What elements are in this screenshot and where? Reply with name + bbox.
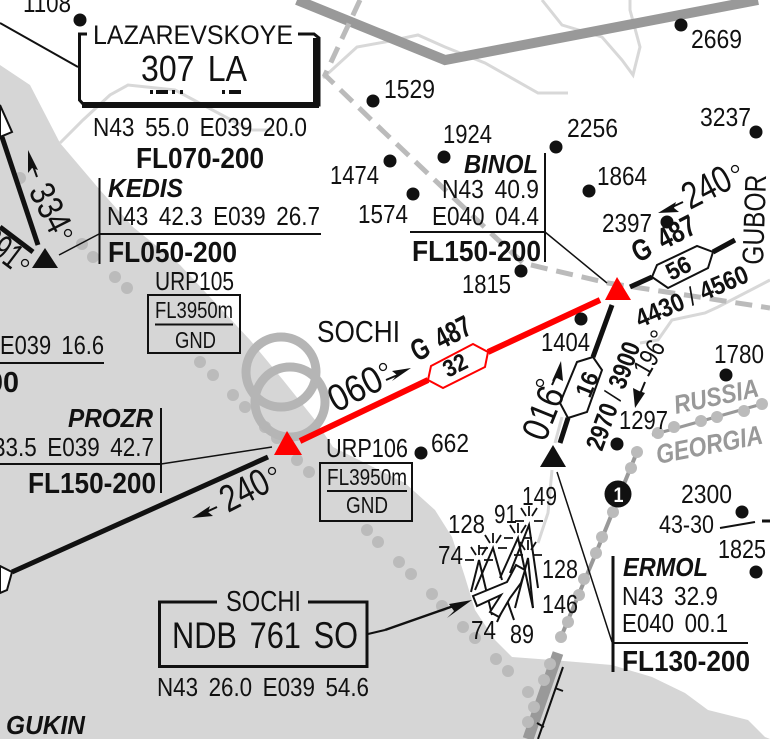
NDB Lazarevskoye box: FL070-200 [136, 143, 264, 175]
waypoint triangles [32, 248, 631, 467]
track 060: 060 [321, 358, 390, 421]
Sochi airport circles [246, 337, 325, 437]
label SOCHI: SOCHI [317, 314, 400, 349]
fix KEDIS [59, 173, 321, 269]
airway segment G487 black east [630, 240, 735, 288]
spot elevations: 1474 [330, 160, 379, 190]
restricted area URP105 [148, 266, 240, 353]
spot elevations: 2669 [691, 24, 742, 54]
obstacle cluster [438, 481, 578, 649]
restricted area URP106: FL3950m [327, 464, 407, 490]
airway segment G487 red: 32 [438, 348, 472, 383]
restricted area URP105: GND [175, 327, 216, 353]
fix BINOL: N43 40.9 [442, 174, 539, 204]
spot elevations: 1864 [597, 161, 647, 191]
NDB Lazarevskoye box: N43 55.0 E039 20.0 [93, 112, 307, 142]
grid minimum 43-30 [659, 511, 770, 539]
obstacle cluster: 91 [494, 499, 517, 529]
restricted area URP106: URP106 [326, 433, 408, 463]
NDB Sochi box: N43 26.0 E039 54.6 [157, 672, 369, 702]
fix BINOL: E040 04.4 [432, 201, 539, 231]
note marker 1: 1 [614, 484, 624, 507]
NDB Lazarevskoye box: 307 LA [141, 48, 247, 89]
thick grey road [297, 0, 758, 60]
track 196 [627, 331, 671, 408]
airway label G 487 east: G 487 [626, 209, 702, 269]
fix BINOL: BINOL [464, 149, 538, 179]
track 291 clipped [0, 219, 31, 277]
track 240 west [192, 461, 277, 521]
spot elevations: 1574 [358, 199, 408, 229]
clipped fix west [0, 330, 104, 399]
NDB Lazarevskoye box [0, 20, 319, 175]
airway segment 016 [560, 305, 612, 443]
track 334 [21, 150, 80, 239]
obstacle cluster: 89 [510, 619, 534, 649]
spot elevations: 3237 [700, 102, 751, 132]
fix ERMOL: E040 00.1 [622, 608, 728, 638]
fix ERMOL [557, 472, 750, 678]
note marker 1 [604, 480, 632, 508]
track 196: 196 [627, 335, 671, 381]
obstacle cluster: 149 [522, 481, 557, 511]
fix KEDIS: KEDIS [108, 173, 184, 203]
obstacle cluster: 74 [471, 615, 496, 645]
airway segment G487 black east: 56 [661, 251, 696, 286]
spot elevations: 662 [431, 428, 469, 458]
grid minimum 43-30: 43-30 [659, 511, 714, 539]
spot elevations: 2397 [602, 208, 652, 238]
restricted area URP105: URP105 [155, 266, 234, 296]
restricted area URP106 [320, 433, 412, 521]
fix BINOL [410, 149, 607, 283]
arrow to NDB Sochi [385, 600, 472, 630]
spot elevations: 1529 [384, 74, 435, 104]
obstacle cluster: 128 [448, 509, 485, 539]
fix KEDIS: N43 42.3 E039 26.7 [107, 201, 320, 231]
NDB Sochi box: SOCHI [226, 586, 301, 618]
FIR boundary dots [14, 172, 768, 728]
fix ERMOL: N43 32.9 [622, 581, 718, 611]
fix ERMOL: FL130-200 [622, 646, 750, 678]
spot elevations: 1815 [462, 269, 511, 299]
spot elevations: 1404 [541, 327, 590, 357]
track 240 east: 240 [675, 158, 739, 218]
airway segment G487 red [300, 300, 600, 441]
airway segment 240 [0, 457, 268, 593]
border lines [528, 404, 762, 739]
airway segment 334 [0, 105, 38, 252]
track 016: 016 [514, 381, 574, 446]
altitudes 2970/3900: 2970 / 3900 [579, 338, 646, 454]
obstacle cluster: 74 [438, 540, 463, 570]
spot elevations: 1297 [619, 405, 668, 435]
fix PROZR [0, 403, 272, 500]
NDB Sochi box [157, 586, 385, 702]
track 334: 334 [21, 176, 80, 239]
track 240 west: 240 [213, 461, 277, 521]
restricted area URP105: FL3950m [155, 297, 233, 323]
fix KEDIS: FL050-200 [108, 237, 237, 269]
altitudes 4430/4560: 4430 / 4560 [631, 259, 753, 334]
restricted area URP106: GND [346, 492, 388, 518]
spot elevations [23, 0, 766, 578]
spot elevations: 2300 [681, 479, 732, 509]
NDB Sochi box: NDB 761 SO [172, 615, 358, 656]
spot elevations: 2256 [567, 113, 618, 143]
boundary tick line [537, 667, 563, 739]
track 240 east [658, 158, 739, 218]
fix PROZR: FL150-200 [28, 468, 156, 500]
clipped fix west: E039 16.6 [0, 330, 104, 360]
NDB Lazarevskoye box: LAZAREVSKOYE [93, 20, 293, 50]
fix ERMOL: ERMOL [623, 552, 708, 582]
fix BINOL: FL150-200 [412, 236, 541, 268]
dashed grey route [325, 0, 770, 308]
fix PROZR: PROZR [68, 403, 153, 433]
thin coastline and rivers [60, 0, 770, 543]
airway segment 016: 16 [571, 368, 605, 401]
obstacle cluster: 128 [542, 554, 578, 584]
airway label G 487 west: G 487 [405, 310, 477, 368]
obstacle cluster: 146 [542, 589, 578, 619]
spot elevations: 1924 [443, 119, 492, 149]
